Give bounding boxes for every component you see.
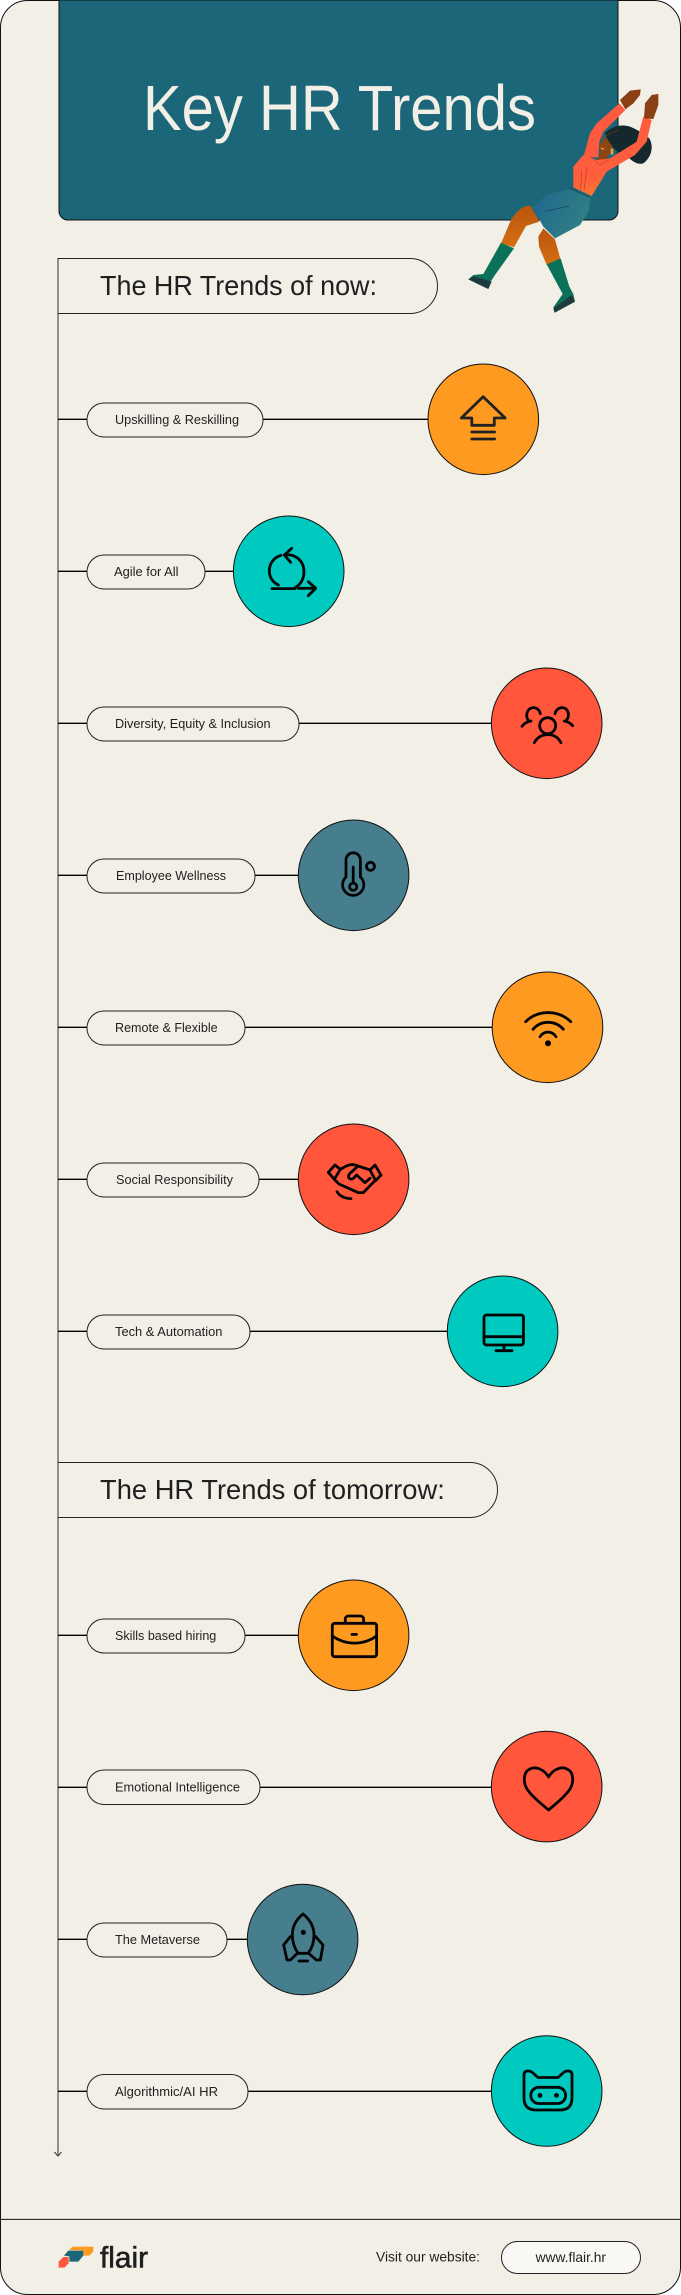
label pill: Algorithmic/AI HR [115, 2084, 218, 2099]
icon: rocket [247, 1884, 358, 1995]
icon: thermometer [298, 820, 409, 931]
trend row: Social Responsibility [58, 1124, 409, 1235]
icon: up arrow with lines [428, 364, 539, 475]
timeline arrow [54, 258, 62, 2156]
hair [605, 125, 652, 164]
label pill: Tech & Automation [115, 1324, 222, 1339]
website prompt: Visit our website: [376, 2248, 480, 2264]
label pill [87, 1923, 227, 1957]
icon: group of people [491, 668, 602, 779]
label pill: Agile for All [114, 564, 179, 579]
trend row: Skills based hiring [58, 1580, 409, 1691]
label pill [87, 1315, 250, 1349]
front leg [538, 228, 561, 265]
label pill [87, 859, 255, 893]
heading: The HR Trends of tomorrow: The HR Trends of tomorrow: [100, 1474, 445, 1505]
torso and raised arm right [573, 117, 652, 196]
label pill [87, 1011, 245, 1045]
label pill: Emotional Intelligence [115, 1780, 240, 1794]
trend row: Employee Wellness [58, 820, 409, 931]
label pill [87, 2074, 248, 2109]
front boot [547, 258, 575, 313]
label pill [87, 1163, 259, 1197]
icon: wifi [492, 972, 603, 1083]
skirt [533, 188, 591, 238]
trend row: Tech & Automation [58, 1276, 558, 1387]
title banner [59, 0, 618, 220]
label pill: Social Responsibility [116, 1172, 233, 1187]
label pill: Upskilling & Reskilling [115, 412, 239, 427]
icon: robot face [491, 2036, 602, 2146]
label pill [87, 403, 263, 437]
label pill: Remote & Flexible [115, 1020, 218, 1035]
title: Key HR Trends [143, 72, 536, 144]
icon: agile loop [233, 516, 344, 627]
trend row: The Metaverse [58, 1884, 358, 1995]
label pill [87, 1770, 260, 1804]
skirt seams [545, 188, 590, 211]
trend row: Remote & Flexible [58, 972, 603, 1083]
website button: www.flair.hr [535, 2249, 606, 2265]
hand left [620, 89, 641, 109]
shirt details [581, 130, 618, 190]
back boot [468, 243, 514, 289]
trend row: Diversity, Equity & Inclusion [58, 668, 602, 779]
back leg [501, 206, 539, 247]
trend row: Upskilling & Reskilling [58, 364, 539, 475]
front boot sole [553, 295, 575, 313]
label pill: Employee Wellness [116, 868, 226, 883]
trend row: Emotional Intelligence [58, 1731, 602, 1842]
label pill [87, 1619, 245, 1653]
icon: monitor [447, 1276, 558, 1387]
label pill: Skills based hiring [115, 1628, 216, 1643]
illustration: jumping woman [468, 89, 658, 313]
label pill: Diversity, Equity & Inclusion [115, 716, 271, 731]
neck and face [597, 137, 612, 161]
heading: The HR Trends of now: The HR Trends of now: [100, 270, 377, 301]
earring and smile [600, 147, 613, 155]
raised arm left [583, 103, 625, 157]
icon: heart [491, 1731, 602, 1842]
hand right [644, 94, 658, 119]
label pill: The Metaverse [115, 1932, 200, 1947]
back boot sole [468, 276, 492, 289]
icon: handshake [298, 1124, 409, 1235]
trend row: Algorithmic/AI HR [58, 2036, 602, 2146]
logo wordmark: flair [100, 2242, 148, 2275]
icon: briefcase [298, 1580, 409, 1691]
heading: The HR Trends of now [58, 258, 437, 314]
heading: The HR Trends of tomorrow [58, 1462, 497, 1518]
trend row: Agile for All [58, 516, 344, 627]
label pill [87, 707, 299, 741]
logo mark [59, 2247, 93, 2268]
label pill [87, 555, 205, 589]
website button [502, 2242, 640, 2274]
footer [0, 2219, 681, 2275]
